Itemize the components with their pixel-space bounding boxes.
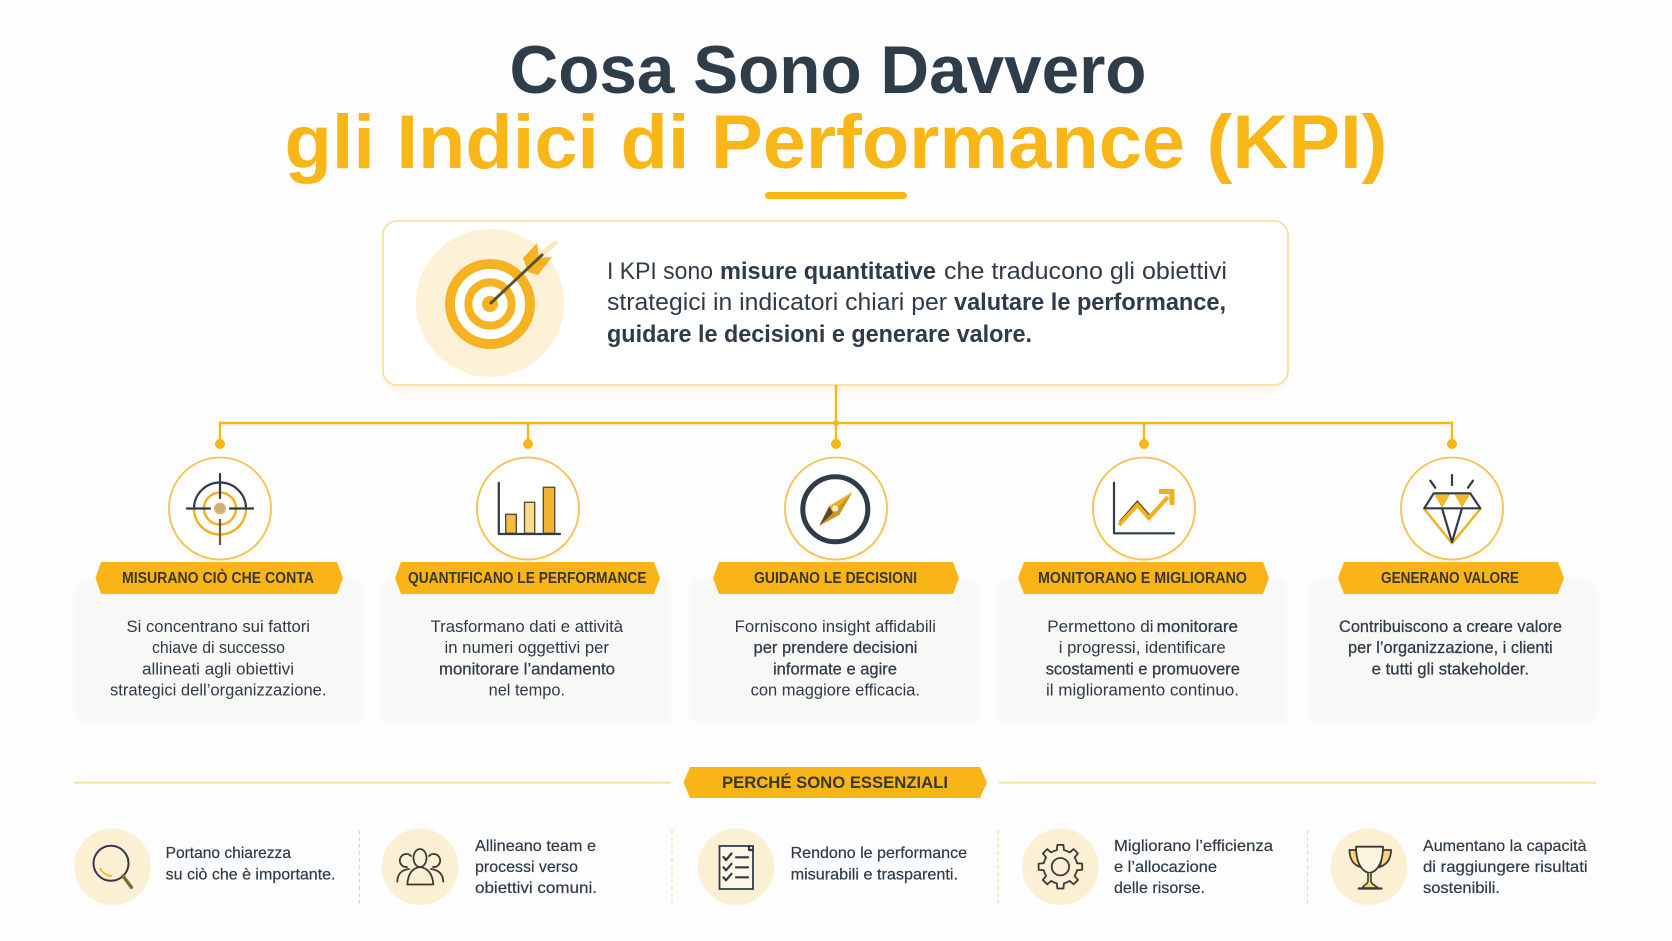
description: monitorare l’andamento bbox=[439, 660, 615, 678]
benefit: aumentano bbox=[1331, 828, 1588, 905]
description: Contribuiscono a creare valore bbox=[1339, 618, 1562, 636]
icon: magnifier bbox=[74, 828, 151, 905]
title bbox=[284, 32, 1388, 185]
panel: generano bbox=[1310, 458, 1597, 724]
icon: trophy bbox=[1331, 828, 1407, 905]
text: Rendono le performance bbox=[791, 845, 967, 862]
description: allineati agli obiettivi bbox=[142, 660, 294, 678]
text bbox=[475, 838, 597, 897]
banner bbox=[1338, 562, 1564, 594]
benefit: rendono bbox=[698, 828, 967, 905]
text: Migliorano l’efficienza bbox=[1114, 838, 1273, 855]
definition text: guidare le decisioni e generare valore. bbox=[607, 321, 1032, 348]
description bbox=[431, 618, 624, 700]
description: con maggiore efficacia. bbox=[751, 682, 920, 700]
icon: target with arrow bbox=[416, 229, 564, 377]
definition text: valutare le performance, bbox=[954, 289, 1226, 316]
text: misurabili e trasparenti. bbox=[791, 866, 958, 884]
panel: monitorano bbox=[999, 458, 1287, 724]
icon: compass bbox=[785, 458, 887, 561]
description: Trasformano dati e attività bbox=[431, 618, 624, 636]
description: nel tempo. bbox=[489, 682, 565, 700]
banner text: GUIDANO LE DECISIONI bbox=[754, 570, 917, 587]
icon: people bbox=[382, 828, 458, 905]
text: di raggiungere risultati bbox=[1423, 859, 1588, 876]
text: processi verso bbox=[475, 859, 578, 876]
title: Cosa Sono Davvero bbox=[510, 32, 1146, 108]
text: Allineano team e bbox=[475, 838, 596, 855]
icon: trend chart bbox=[1093, 458, 1195, 561]
section heading: perché sono essenziali bbox=[74, 767, 1596, 798]
description: scostamenti e promuovere bbox=[1046, 660, 1240, 678]
text: obiettivi comuni. bbox=[475, 880, 597, 897]
banner bbox=[1018, 562, 1269, 594]
description: chiave di successo bbox=[152, 639, 285, 657]
text: sostenibili. bbox=[1423, 880, 1500, 897]
panel: definition bbox=[383, 221, 1288, 390]
description: Si concentrano sui fattori bbox=[126, 618, 310, 636]
text bbox=[1114, 838, 1273, 897]
definition text: che traducono gli obiettivi bbox=[944, 258, 1227, 285]
title: gli Indici di Performance (KPI) bbox=[284, 100, 1388, 185]
benefit: chiarezza bbox=[74, 828, 335, 905]
title underline bbox=[765, 192, 907, 199]
description bbox=[735, 618, 936, 700]
description: informate e agire bbox=[773, 660, 897, 678]
description bbox=[1339, 618, 1562, 678]
description: monitorare bbox=[1157, 618, 1238, 636]
description bbox=[1046, 618, 1240, 700]
banner bbox=[395, 562, 660, 594]
icon: diamond bbox=[1401, 458, 1503, 561]
panel: misurano bbox=[75, 458, 364, 724]
description: per l’organizzazione, i clienti bbox=[1348, 639, 1553, 657]
description: strategici dell’organizzazione. bbox=[110, 682, 326, 700]
connector tree bbox=[215, 385, 1457, 449]
text: delle risorse. bbox=[1114, 880, 1205, 897]
description: e tutti gli stakeholder. bbox=[1372, 660, 1529, 678]
text: Portano chiarezza bbox=[166, 845, 291, 862]
banner text: MISURANO CIÒ CHE CONTA bbox=[122, 569, 314, 587]
banner text: GENERANO VALORE bbox=[1381, 570, 1519, 587]
definition text: misure quantitative bbox=[720, 258, 936, 285]
benefit: migliorano bbox=[1022, 828, 1273, 905]
benefit: allineano bbox=[382, 828, 597, 905]
description: per prendere decisioni bbox=[754, 639, 918, 657]
banner text: MONITORANO E MIGLIORANO bbox=[1038, 570, 1247, 587]
banner bbox=[713, 562, 959, 594]
icon: crosshair bbox=[169, 458, 271, 561]
description: Forniscono insight affidabili bbox=[735, 618, 936, 636]
icon: gear bbox=[1022, 828, 1099, 905]
section heading: perché sono essenziali: PERCHÉ SONO ESSENZIALI bbox=[722, 773, 948, 792]
icon: checklist bbox=[698, 828, 774, 905]
text: e l’allocazione bbox=[1114, 859, 1217, 876]
definition text: I KPI sono bbox=[607, 258, 713, 285]
definition text bbox=[607, 258, 1227, 348]
panel: quantificano bbox=[383, 458, 671, 724]
description: il miglioramento continuo. bbox=[1046, 682, 1239, 700]
banner text: QUANTIFICANO LE PERFORMANCE bbox=[408, 570, 646, 587]
definition text: strategici in indicatori chiari per bbox=[607, 289, 947, 316]
text bbox=[1423, 838, 1588, 897]
description: in numeri oggettivi per bbox=[444, 639, 610, 657]
description: i progressi, identificare bbox=[1059, 639, 1226, 657]
banner bbox=[96, 562, 343, 594]
description bbox=[110, 618, 326, 700]
panel: guidano bbox=[690, 458, 979, 724]
text: Aumentano la capacità bbox=[1423, 838, 1587, 855]
description: Permettono di bbox=[1047, 618, 1154, 636]
icon: bar chart bbox=[477, 458, 579, 561]
text bbox=[791, 845, 967, 884]
text: su ciò che è importante. bbox=[166, 866, 336, 884]
text bbox=[166, 845, 336, 884]
